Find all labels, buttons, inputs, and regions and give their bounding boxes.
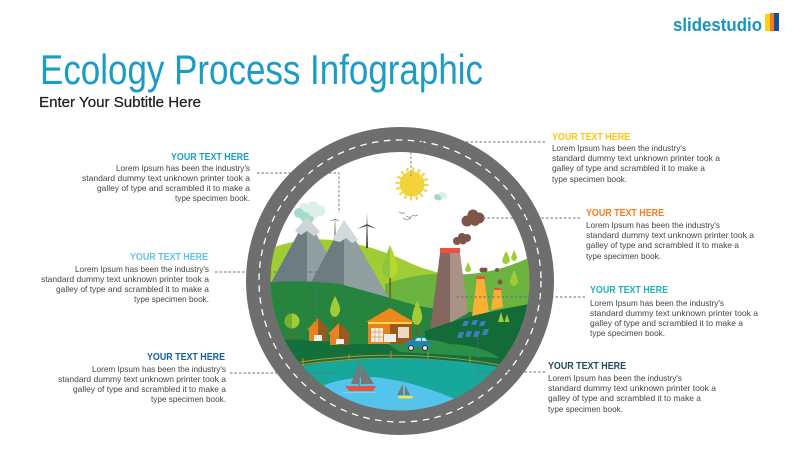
text block: bottom left: type specimen book. [151,394,226,404]
text block: top left: YOUR TEXT HERE [171,152,249,163]
text block: bottom right: YOUR TEXT HERE [548,361,626,372]
text block: top right [552,132,720,184]
birds [399,212,418,220]
text block: upper right [586,208,754,261]
text block: bottom right [548,361,716,414]
blue water [324,377,454,410]
text block: top right: standard dummy text unknown printer took a [552,153,720,163]
text block: top left: standard dummy text unknown printer took a [82,173,250,183]
small house 2 [328,323,351,345]
tree by houses [330,296,340,332]
text block: lower right: type specimen book. [590,328,665,338]
text block: bottom right: standard dummy text unknown printer took a [548,383,716,393]
round tree [284,314,300,341]
logo: slidestudio [673,14,762,35]
text block: upper right: YOUR TEXT HERE [586,208,664,219]
text block: middle left: type specimen book. [134,294,209,304]
text block: bottom left: standard dummy text unknown printer took a [58,374,226,384]
text block: middle left: standard dummy text unknown printer took a [41,274,209,284]
small house [307,318,329,341]
medium green hill [385,255,535,340]
text block: top right: galley of type and scrambled it to make a [552,163,705,173]
dark green hill [262,281,480,360]
text block: bottom left: galley of type and scrambled it to make a [73,384,226,394]
text block: top left: Lorem Ipsum has been the industry's [116,163,250,173]
text block: upper right: standard dummy text unknown printer took a [586,230,754,240]
text block: lower right [590,285,758,338]
text block: bottom right: Lorem Ipsum has been the industry's [548,373,682,383]
text block: lower right: standard dummy text unknown printer took a [590,308,758,318]
subtitle: Enter Your Subtitle Here [39,95,201,111]
right mountain [312,220,388,298]
text block: middle left [41,252,209,304]
landscape scene [270,168,530,410]
text block: top left [82,152,250,203]
lake [302,358,498,410]
text block: lower right: galley of type and scrambled it to make a [590,318,743,328]
text block: middle left: Lorem Ipsum has been the industry's [75,264,209,274]
title: Ecology Process Infographic [40,46,483,93]
text block: bottom right: galley of type and scrambled it to make a [548,393,701,403]
text block: upper right: galley of type and scrambled it to make a [586,240,739,250]
left mountain [270,217,326,290]
small cloud [434,192,448,200]
big sail boat [342,362,377,392]
text block: bottom left: Lorem Ipsum has been the industry's [92,364,226,374]
icon: sun [398,170,426,198]
text block: lower right: Lorem Ipsum has been the industry's [590,298,724,308]
leader lines [215,142,585,373]
text block: top right: Lorem Ipsum has been the industry's [552,143,686,153]
small trees [465,250,518,286]
lower green band [284,340,503,375]
deep green field [425,304,528,370]
yellow chimneys [472,276,503,316]
text block: top right: type specimen book. [552,174,627,184]
smoke clouds [453,210,502,284]
wind turbines [329,212,377,248]
text block: bottom left: YOUR TEXT HERE [147,352,225,363]
text block: upper right: Lorem Ipsum has been the industry's [586,220,720,230]
car [406,337,431,350]
text block: lower right: YOUR TEXT HERE [590,285,668,296]
big house [366,308,414,344]
small trees right [498,312,510,322]
text block: top left: galley of type and scrambled it to make a [97,183,250,193]
road ring [258,140,542,422]
light green hill [270,239,438,330]
text block: bottom left [58,352,226,404]
text block: bottom right: type specimen book. [548,404,623,414]
mountain cloud [294,202,326,222]
cooling tower [430,248,468,331]
solar panels [457,320,489,338]
text block: top right: YOUR TEXT HERE [552,132,630,143]
text block: middle left: YOUR TEXT HERE [130,252,208,263]
text block: top left: type specimen book. [175,193,250,203]
small sail boat [397,384,413,398]
text block: upper right: type specimen book. [586,251,661,261]
tall tree [382,245,398,298]
tree by big house [412,301,422,336]
fence [300,351,500,368]
text block: middle left: galley of type and scrambled it to make a [56,284,209,294]
